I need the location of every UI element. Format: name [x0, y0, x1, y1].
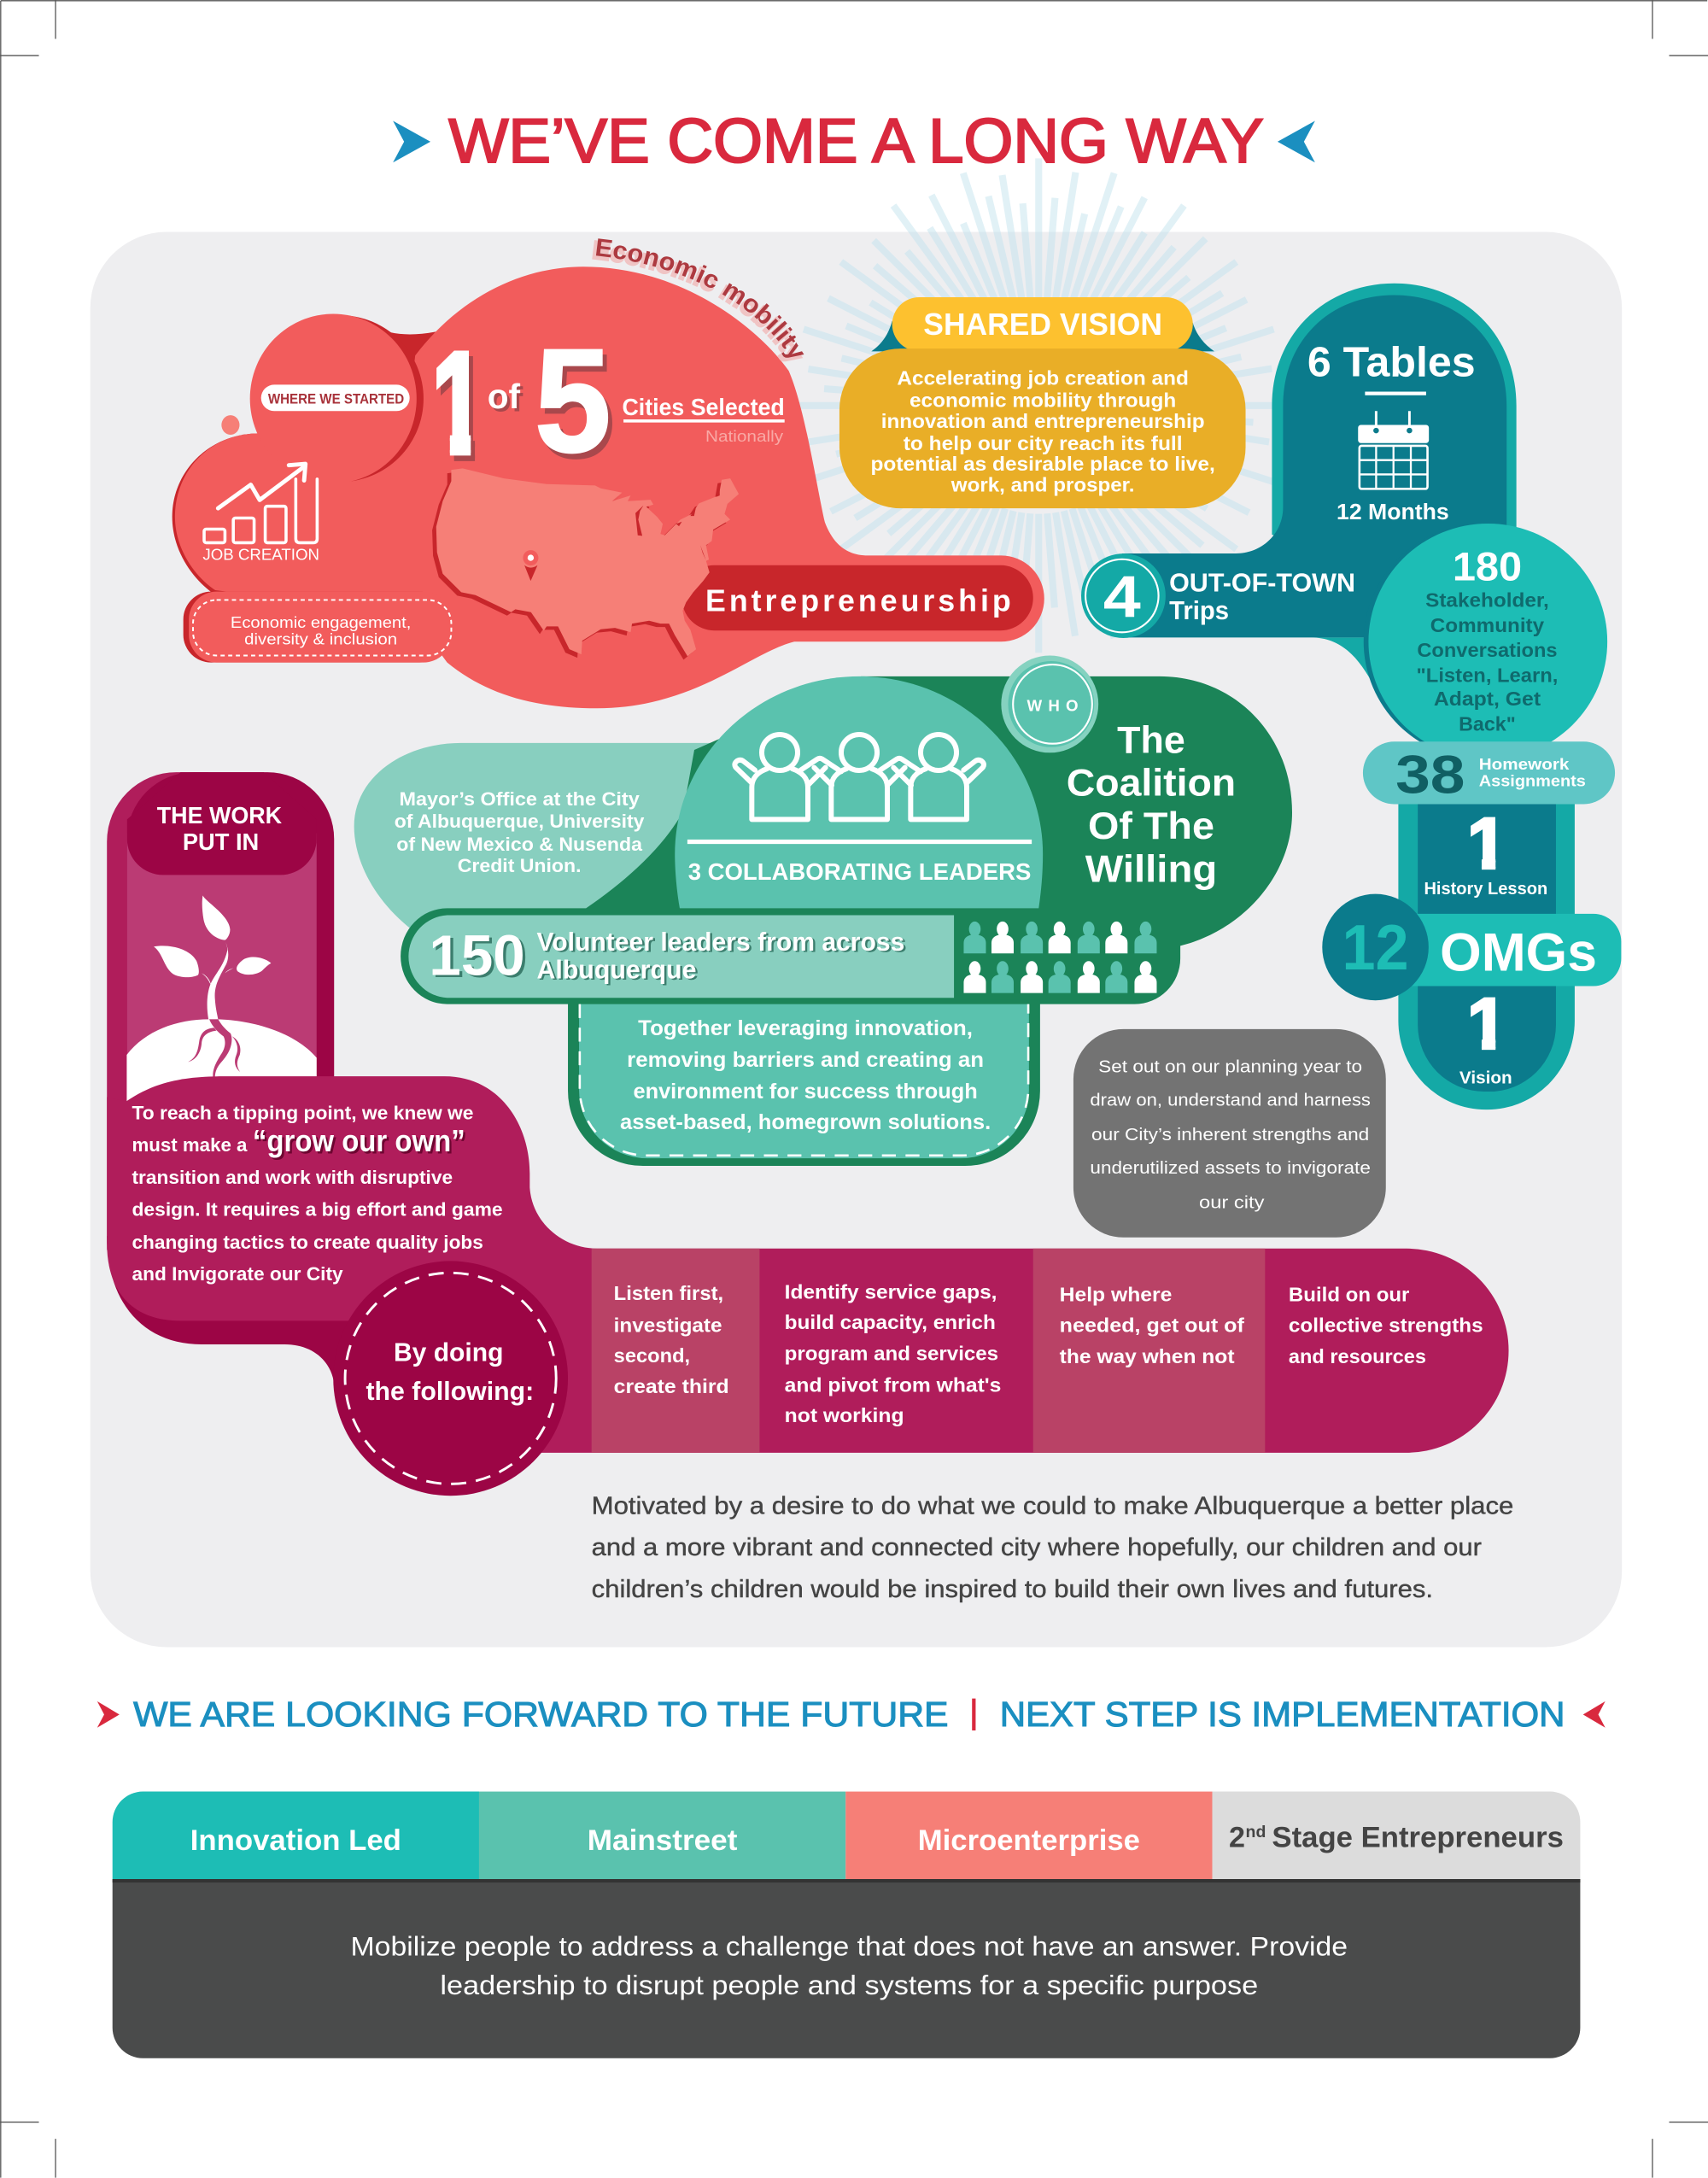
heading pill: SHARED VISION — [923, 307, 1162, 342]
header: 2nd stage: Stage Entrepreneurs — [1272, 1822, 1564, 1854]
curved label: economic mobility: Economic mobility — [592, 240, 803, 362]
icon: left title arrow — [393, 120, 430, 162]
header: innovation led — [113, 1792, 479, 1879]
icon: job creation — [204, 464, 317, 542]
12 OMGs bar — [1322, 894, 1621, 1000]
150 volunteers bar: Volunteer leaders from across — [536, 928, 904, 957]
together box: environment for success through — [633, 1080, 978, 1104]
engagement box — [184, 592, 451, 663]
180 conversations circle: Community — [1430, 614, 1544, 636]
step: help where needed: needed, get out of — [1060, 1314, 1244, 1336]
step: listen first: create third — [614, 1375, 729, 1397]
step: listen first — [614, 1282, 729, 1397]
coalition heading: Coalition — [1067, 763, 1236, 805]
1 vision: Vision — [1459, 1069, 1512, 1087]
header: innovation led: Innovation Led — [190, 1824, 401, 1857]
step: build on strengths: collective strengths — [1289, 1314, 1483, 1336]
body — [113, 1879, 1580, 2058]
step: listen first: second, — [614, 1344, 690, 1367]
teal corner accents — [871, 321, 1214, 351]
body text: design. It requires a big effort and game — [132, 1199, 503, 1221]
cities selected label: Cities Selected — [622, 394, 785, 420]
heading — [127, 772, 317, 875]
coalition heading: Willing — [1085, 849, 1217, 891]
circle — [250, 313, 417, 483]
step: build on strengths: Build on our — [1289, 1284, 1410, 1306]
panel: planning year note: our City’s inherent strengths and — [1091, 1126, 1369, 1145]
180 conversations circle: Adapt, Get — [1434, 688, 1541, 710]
180 conversations circle: Conversations — [1417, 639, 1558, 661]
heading: PUT IN — [183, 828, 259, 855]
engagement box: diversity & inclusion — [244, 629, 397, 647]
body: innovation and entrepreneurship — [881, 410, 1205, 432]
where we started pill — [261, 384, 410, 411]
motivation paragraph: and a more vibrant and connected city where hopefully, our children and our — [592, 1534, 1482, 1561]
panel: planning year note: our city — [1199, 1194, 1265, 1213]
150 volunteers bar: Albuquerque — [536, 957, 696, 985]
together box — [568, 1000, 1040, 1166]
180 conversations circle — [1364, 524, 1607, 759]
together box: asset-based, homegrown solutions. — [620, 1110, 991, 1134]
12 months label: 12 Months — [1337, 499, 1449, 524]
main red blob — [389, 266, 1044, 708]
150 volunteers bar: Albuquerque — [539, 957, 699, 986]
1 history lesson — [1424, 802, 1547, 899]
map pin — [523, 550, 538, 581]
step background: fourth column — [1033, 1249, 1265, 1453]
entrepreneurship bar: Entrepreneurship — [705, 583, 1011, 618]
curved label: economic mobility: Economic mobility — [596, 238, 804, 358]
4 trips circle — [1081, 553, 1166, 638]
step: build on strengths: and resources — [1289, 1345, 1426, 1367]
150 volunteers bar — [408, 916, 954, 998]
step: identify service gaps: not working — [785, 1404, 904, 1426]
coalition heading — [1067, 719, 1236, 891]
body: potential as desirable place to live, — [871, 453, 1215, 475]
panel: process numbers — [1081, 284, 1621, 1109]
body text: changing tactics to create quality jobs — [132, 1232, 483, 1253]
step: listen first: investigate — [614, 1314, 722, 1336]
leaders dome: 3 COLLABORATING LEADERS — [688, 858, 1031, 885]
stat: 1 of 5: 1 — [432, 322, 484, 483]
body: economic mobility through — [910, 389, 1176, 411]
step: identify service gaps: and pivot from what's — [785, 1373, 1001, 1396]
38 homework pill: Assignments — [1479, 771, 1586, 789]
150 volunteers bar: Volunteer leaders from across — [539, 930, 907, 958]
out of town trips label: Trips — [1169, 595, 1229, 625]
stat: 1 of 5: 5 — [535, 318, 611, 483]
teal connector under band — [1311, 637, 1389, 688]
stat: 1 of 5: 5 — [539, 324, 615, 489]
panel: planning year note: draw on, understand and harness — [1090, 1091, 1371, 1109]
header: 2nd stage: nd — [1246, 1823, 1266, 1841]
panel: grey background — [91, 232, 1622, 1647]
column left stripe — [107, 772, 208, 1250]
heading: THE WORK — [157, 802, 282, 828]
panel: where we started — [173, 238, 1044, 709]
section heading: looking forward: NEXT STEP IS IMPLEMENTATION — [1000, 1695, 1565, 1734]
header: microenterprise — [845, 1792, 1213, 1879]
pale partner blob: of Albuquerque, University — [395, 811, 645, 832]
6 tables label: 6 Tables — [1307, 340, 1476, 386]
panel: planning year note: Set out on our planning year to — [1098, 1057, 1362, 1076]
6 tables inner and trips band — [1122, 296, 1506, 637]
heading pill — [892, 297, 1193, 351]
panel: the work put in — [107, 772, 334, 1250]
180 conversations circle: "Listen, Learn, — [1417, 664, 1558, 686]
icon: right red arrow — [1583, 1701, 1606, 1728]
step: help where needed — [1060, 1284, 1244, 1367]
step: help where needed: the way when not — [1060, 1345, 1235, 1367]
panel: shared vision — [839, 297, 1246, 508]
lower column inner — [1418, 792, 1556, 1092]
step: help where needed: Help where — [1060, 1284, 1172, 1306]
cities selected label: Nationally — [705, 427, 784, 445]
dark base — [107, 1236, 555, 1389]
180 conversations circle: Stakeholder, — [1425, 589, 1549, 612]
title — [393, 106, 1315, 176]
12 OMGs bar: OMGs — [1440, 923, 1597, 983]
out of town trips label: OUT-OF-TOWN — [1169, 568, 1355, 598]
180 conversations circle: Back" — [1459, 712, 1516, 735]
body: Accelerating job creation and — [897, 366, 1189, 389]
pale partner blob: Credit Union. — [458, 855, 581, 876]
step: identify service gaps: program and services — [785, 1343, 998, 1365]
entrepreneurship bar — [681, 565, 1033, 630]
coalition heading: The — [1117, 719, 1185, 761]
stat: 1 of 5: 1 — [436, 328, 488, 489]
panel: planning year note: underutilized assets to invigorate — [1090, 1159, 1371, 1178]
12 OMGs bar: 12 — [1342, 911, 1409, 983]
by doing the following circle: the following: — [366, 1376, 534, 1406]
body text: To reach a tipping point, we knew we — [132, 1103, 473, 1124]
pale partner blob — [354, 743, 729, 934]
body: leadership to disrupt people and systems for a specific purpose — [440, 1970, 1258, 2000]
header: 2nd stage — [1213, 1792, 1580, 1879]
section heading: looking forward: WE ARE LOOKING FORWARD TO THE FUTURE — [133, 1695, 949, 1734]
body: Mobilize people to address a challenge that does not have an answer. Provide — [351, 1930, 1348, 1961]
38 homework pill: Homework — [1479, 755, 1570, 773]
body text: “grow our own” — [254, 1126, 467, 1160]
stat: 1 of 5: of — [488, 377, 521, 416]
icon: sprout — [126, 895, 317, 1102]
out of town trips label — [1169, 568, 1355, 625]
panel: planning year note — [1073, 1029, 1386, 1238]
body text: “grow our own” — [253, 1124, 465, 1158]
body text: transition and work with disruptive — [132, 1167, 453, 1188]
pale partner blob: of New Mexico & Nusenda — [396, 834, 643, 855]
icon: right title arrow — [1278, 120, 1315, 162]
icon: calendar — [1358, 411, 1429, 489]
job creation label: JOB CREATION — [202, 545, 319, 563]
stat: 1 of 5 — [436, 348, 612, 461]
plant panel — [127, 834, 317, 1098]
6 tables outer — [1272, 284, 1517, 611]
who badge: WHO — [1027, 697, 1079, 715]
motivation paragraph: Motivated by a desire to do what we could to make Albuquerque a better place — [592, 1492, 1513, 1519]
step: identify service gaps — [785, 1280, 1001, 1426]
icon: three leaders — [734, 735, 984, 819]
body text: and Invigorate our City — [132, 1263, 343, 1285]
engagement box: Economic engagement, — [231, 613, 411, 631]
panel: who, the coalition — [354, 655, 1292, 1166]
title text: WE’VE COME A LONG WAY — [448, 106, 1264, 176]
body text — [132, 1103, 503, 1285]
lower column outer — [1398, 778, 1575, 1109]
4 trips circle: 4 — [1103, 565, 1141, 629]
body — [839, 348, 1246, 508]
step: identify service gaps: build capacity, enrich — [785, 1311, 996, 1333]
pink dot — [221, 415, 239, 435]
step: listen first: Listen first, — [614, 1282, 723, 1304]
1 vision: 1 — [1467, 983, 1507, 1064]
by doing the following circle: By doing — [394, 1337, 503, 1367]
step background: second column — [592, 1249, 759, 1453]
lower-left lobe edge — [173, 433, 417, 611]
step: identify service gaps: Identify service gaps, — [785, 1280, 997, 1303]
leaders dome — [675, 676, 1043, 908]
where we started pill: WHERE WE STARTED — [268, 391, 404, 407]
body: work, and prosper. — [951, 474, 1134, 496]
pale partner blob: Mayor’s Office at the City — [399, 788, 640, 810]
circle shadow — [257, 315, 424, 482]
header: mainstreet — [479, 1792, 845, 1879]
38 homework pill: 38 — [1395, 745, 1465, 805]
1 history lesson: 1 — [1467, 802, 1507, 883]
cities selected label — [622, 394, 785, 445]
150 volunteers bar: 150 — [429, 924, 525, 987]
180 conversations circle: 180 — [1453, 544, 1522, 589]
section heading: looking forward — [97, 1695, 1606, 1734]
icon: left red arrow — [97, 1701, 120, 1728]
together box: Together leveraging innovation, — [638, 1016, 973, 1040]
body: to help our city reach its full — [904, 432, 1183, 454]
body text: must make a — [132, 1134, 248, 1156]
38 homework pill — [1363, 741, 1615, 805]
1 history lesson: History Lesson — [1424, 880, 1547, 899]
motivation paragraph — [592, 1492, 1513, 1603]
sunburst behind shared vision — [794, 158, 1283, 653]
motivation paragraph: children’s children would be inspired to build their own lives and futures. — [592, 1576, 1433, 1603]
table: next step categories — [113, 1792, 1580, 2058]
header: microenterprise: Microenterprise — [918, 1824, 1140, 1857]
green coalition body — [401, 676, 1292, 1004]
header: mainstreet: Mainstreet — [588, 1824, 737, 1857]
by doing the following circle — [333, 1261, 568, 1496]
coalition heading: Of The — [1088, 805, 1214, 847]
icon: volunteer people rows — [963, 922, 1156, 993]
map of the USA — [432, 468, 739, 659]
crimson body and steps bar — [107, 1076, 1509, 1453]
dark wedge — [359, 317, 442, 364]
together box: removing barriers and creating an — [627, 1048, 984, 1072]
who badge — [1001, 655, 1098, 752]
header: 2nd stage: 2 — [1229, 1822, 1245, 1854]
column dark body — [127, 772, 334, 1111]
stat: 1 of 5: of — [490, 379, 524, 419]
step: build on strengths — [1289, 1284, 1483, 1367]
150 volunteers bar: 150 — [432, 927, 528, 990]
lower-left lobe — [175, 433, 444, 618]
panel: grow our own — [107, 1076, 1509, 1496]
1 vision — [1459, 983, 1512, 1087]
